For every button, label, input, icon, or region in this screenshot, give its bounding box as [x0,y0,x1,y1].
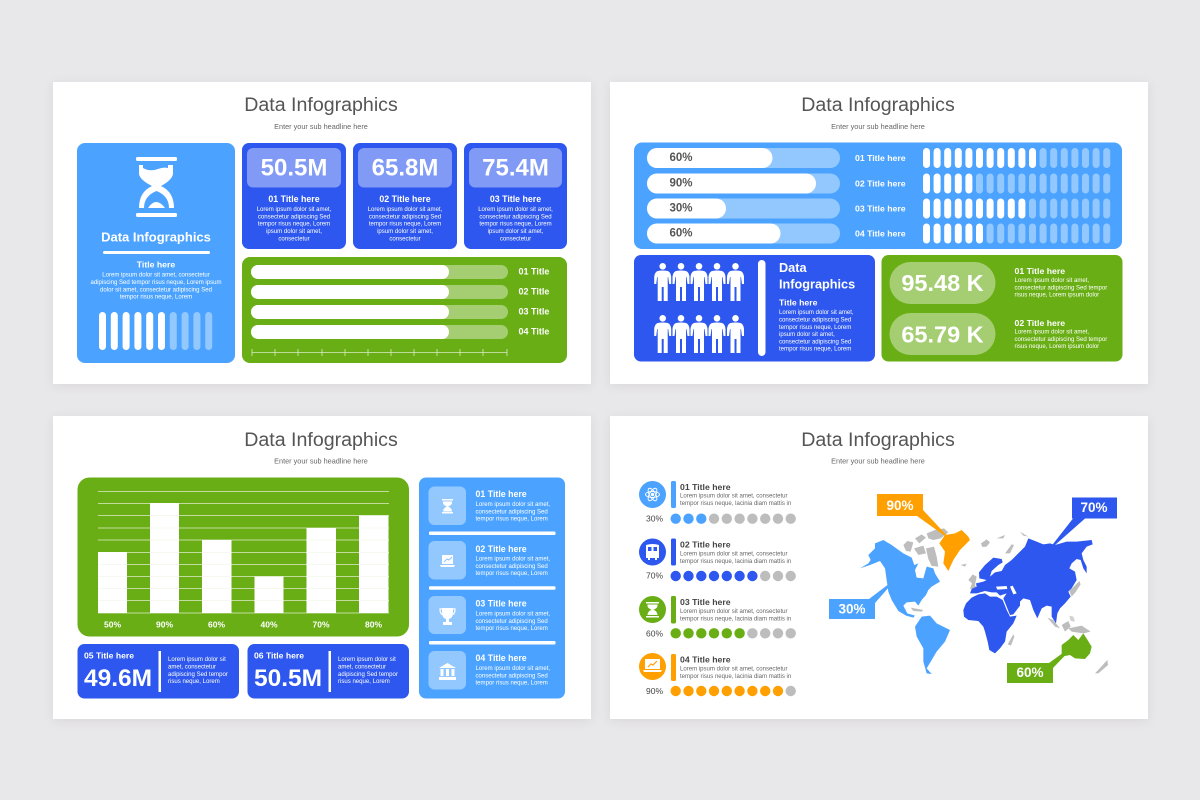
slide 2 title [801,94,955,131]
panel: hourglass summary: dolor sit amet, consectetur adipiscing Sed [100,287,212,293]
list item 04: tempor risus neque, lacinia diam mattis in [680,674,791,680]
icon: bus [646,544,659,560]
list item 02: 70% [646,570,663,580]
card: 75.4M: ipsum dolor sit amet, [488,229,544,235]
card: 49.6M: amet, consectetur [168,664,216,670]
panel: icon list: Lorem ipsum dolor sit amet, [476,666,550,672]
bar chart: 60% [208,620,225,630]
panel: icon list: tempor risus neque, Lorem [476,571,548,577]
panel: K stats: risus neque, Lorem ipsum dolor [1014,344,1099,350]
card: 65.8M: ipsum dolor sit amet, [377,229,433,235]
slide 4 title: Data Infographics [801,429,955,451]
list item 03: Lorem ipsum dolor sit amet, consectetur [680,609,788,615]
slide 3 title: Data Infographics [244,429,398,451]
card: 75.4M: consectetur adipiscing Sed [479,214,552,220]
panel: horizontal bars green: 04 Title [518,326,549,336]
list item 01 [639,481,796,524]
callout: 90% [877,494,952,541]
panel: percentage bars: 01 Title here [855,153,906,163]
panel: percentage bars: 90% [669,178,693,190]
pill rows [923,148,1110,244]
card: 50.5M lower: amet, consectetur [338,664,386,670]
card: 50.5M lower: risus neque, Lorem [338,679,390,685]
card: 75.4M: consectetur [500,236,531,242]
panel: K stats: 02 Title here [1014,318,1065,328]
icon: hourglass [136,157,177,217]
panel: K stats: Lorem ipsum dolor sit amet, [1014,330,1089,336]
card: 50.5M lower [248,644,409,698]
list item 03: tempor risus neque, lacinia diam mattis in [680,616,791,622]
panel: icon list: Lorem ipsum dolor sit amet, [476,502,550,508]
panel: percentage bars: 60% [669,228,693,240]
card: 65.8M: tempor risus neque, Lorem [369,222,441,228]
panel: icon list [419,478,565,698]
callout: 90%: 90% [886,498,914,513]
list item 03: 60% [646,628,663,638]
card: 49.6M: 49.6M [84,665,152,692]
grey islands [903,528,1108,673]
card: 50.5M lower: Lorem ipsum dolor sit [338,657,396,663]
progress pills [99,312,212,350]
callout: 60%: 60% [1016,665,1044,680]
panel: people pictogram: Data [779,261,807,275]
list item 02: Lorem ipsum dolor sit amet, consectetur [680,552,788,558]
slide 3 title: Enter your sub headline here [274,456,368,466]
panel: icon list: 02 Title here [476,544,527,554]
panel: icon list: Lorem ipsum dolor sit amet, [476,612,550,618]
panel: K stats: 01 Title here [1014,266,1065,276]
panel: percentage bars: 03 Title here [855,204,906,214]
panel: icon list: consectetur adipiscing Sed [476,619,548,625]
icon: laptop chart [440,555,455,567]
panel: horizontal bars green: 03 Title [518,306,549,316]
card: 50.5M: consectetur adipiscing Sed [258,214,330,220]
card: 65.8M: consectetur [389,236,421,242]
panel: horizontal bars green: 02 Title [518,286,549,296]
panel: hourglass summary: tempor risus neque, Lorem [120,294,192,300]
card: 49.6M: 05 Title here [84,650,134,660]
card: 50.5M: ipsum dolor sit amet, [266,229,322,235]
list item 02: tempor risus neque, lacinia diam mattis in [680,559,791,565]
panel: people pictogram: consectetur adipiscing Sed [779,318,851,324]
panel: K stats: risus neque, Lorem ipsum dolor [1014,292,1099,298]
icon: atom [646,487,660,502]
panel: percentage bars [634,142,1122,249]
panel: percentage bars: 04 Title here [855,228,906,238]
card: 50.5M lower: adipiscing Sed tempor [338,672,398,678]
card: 49.6M: adipiscing Sed tempor [168,672,228,678]
slide 1 title: Enter your sub headline here [274,122,368,131]
panel: icon list: tempor risus neque, Lorem [476,626,548,632]
panel: K stats [882,255,1122,362]
list item 02: 02 Title here [680,540,731,550]
panel: people pictogram: Infographics [779,278,855,292]
bar chart: 40% [260,620,278,630]
panel: icon list: 04 Title here [476,653,527,663]
icon: people rows [654,263,744,353]
list item 02 [639,538,796,581]
card: 75.4M [464,143,567,249]
callout: 30%: 30% [838,602,866,616]
slide 4 title: Enter your sub headline here [831,456,925,466]
panel: icon list: consectetur adipiscing Sed [476,564,548,570]
bar chart: 80% [365,620,382,630]
card: 49.6M: risus neque, Lorem [168,679,220,685]
panel: hourglass summary: Lorem ipsum dolor sit amet, consectetur [102,272,210,278]
bar chart [78,478,409,636]
panel: K stats: consectetur adipiscing Sed tempor [1014,285,1107,291]
icon: trophy [440,608,455,625]
card: 50.5M lower: 06 Title here [254,650,304,660]
card: 75.4M: Lorem ipsum dolor sit amet, [478,207,553,213]
bar chart: 50% [104,620,121,630]
panel: icon list: Lorem ipsum dolor sit amet, [476,556,550,562]
panel: hourglass summary [77,143,235,363]
card: 50.5M: 01 Title here [268,194,320,204]
card: 50.5M: consectetur [278,236,310,242]
card: 75.4M: tempor risus neque, Lorem [479,222,552,228]
card: 50.5M: tempor risus neque, Lorem [258,222,330,228]
axis [252,349,507,356]
card: 50.5M: 50.5M [261,154,327,182]
list item 04: 04 Title here [680,654,731,664]
card: 65.8M [353,143,457,249]
panel: icon list: 01 Title here [476,489,527,499]
callout: 60% [1007,642,1078,683]
card: 65.8M: Lorem ipsum dolor sit amet, [368,207,443,213]
callout: 70% [1046,498,1117,553]
list item 01: Lorem ipsum dolor sit amet, consectetur [680,494,788,500]
panel: percentage bars: 02 Title here [855,178,906,188]
card: 75.4M: 75.4M [482,154,549,182]
slide 3 title [244,429,398,466]
icon: hourglass [646,602,659,618]
icon: laptop chart [643,659,662,672]
panel: people pictogram: tempor risus neque, Lorem [779,325,851,331]
panel: people pictogram: consectetur adipiscing Sed [779,339,851,345]
panel: people pictogram: tempor risus neque, Lorem [779,346,851,352]
slide 3 background [53,416,591,719]
list item 01: 01 Title here [680,482,731,492]
card: 49.6M: Lorem ipsum dolor sit [168,657,226,663]
panel: hourglass summary: adipiscing Sed tempor risus neque, Lorem ipsum [90,280,222,286]
panel: K stats: Lorem ipsum dolor sit amet, [1014,278,1089,284]
slide 4 background [610,416,1148,719]
icon: small hourglass [442,499,453,514]
panel: hourglass summary: Data Infographics [101,230,211,244]
card: 50.5M: Lorem ipsum dolor sit amet, [257,207,332,213]
list item 01: 30% [646,514,663,524]
list item 04 [639,653,796,696]
panel: K stats: 95.48 K [901,270,984,296]
slide 1 title: Data Infographics [244,94,398,116]
slide 4 title [801,429,955,466]
bar chart: 70% [312,620,330,630]
callout: 30% [829,577,898,619]
world map [860,528,1108,674]
card: 49.6M [78,644,239,698]
icon: bank [439,663,456,680]
panel: people pictogram: ipsum dolor sit amet, [779,332,835,338]
card: 65.8M: 65.8M [372,154,438,182]
panel: K stats: consectetur adipiscing Sed tempor [1014,337,1107,343]
panel: icon list: tempor risus neque, Lorem [476,516,548,522]
list item 03 [639,596,796,638]
callout: 70%: 70% [1080,500,1108,515]
panel: people pictogram [634,255,875,362]
panel: horizontal bars green: 01 Title [518,266,549,276]
slide 1 background [53,82,591,384]
panel: horizontal bars green [242,257,567,363]
panel: percentage bars: 60% [669,152,693,164]
panel: icon list: tempor risus neque, Lorem [476,680,548,686]
panel: icon list: consectetur adipiscing Sed [476,673,548,679]
panel: hourglass summary: Title here [137,260,175,270]
bar chart: 90% [156,620,173,630]
card: 65.8M: consectetur adipiscing Sed [369,214,441,220]
list item 04: 90% [646,686,663,696]
panel: K stats: 65.79 K [901,322,984,348]
card: 50.5M lower: 50.5M [254,665,322,692]
panel: percentage bars: 30% [669,202,693,214]
card: 65.8M: 02 Title here [379,194,431,204]
list item 01: tempor risus neque, lacinia diam mattis in [680,501,791,507]
list item 03: 03 Title here [680,597,731,607]
card: 75.4M: 03 Title here [490,194,541,204]
slide 2 title: Data Infographics [801,94,955,116]
slide 1 title [244,94,398,131]
panel: icon list: consectetur adipiscing Sed [476,509,548,515]
list item 04: Lorem ipsum dolor sit amet, consectetur [680,666,788,672]
slide 2 title: Enter your sub headline here [831,122,925,131]
card: 50.5M [242,143,346,249]
panel: people pictogram: Title here [779,298,818,308]
panel: icon list: 03 Title here [476,598,527,608]
panel: people pictogram: Lorem ipsum dolor sit amet, [779,310,854,316]
slide 2 background [610,82,1148,384]
